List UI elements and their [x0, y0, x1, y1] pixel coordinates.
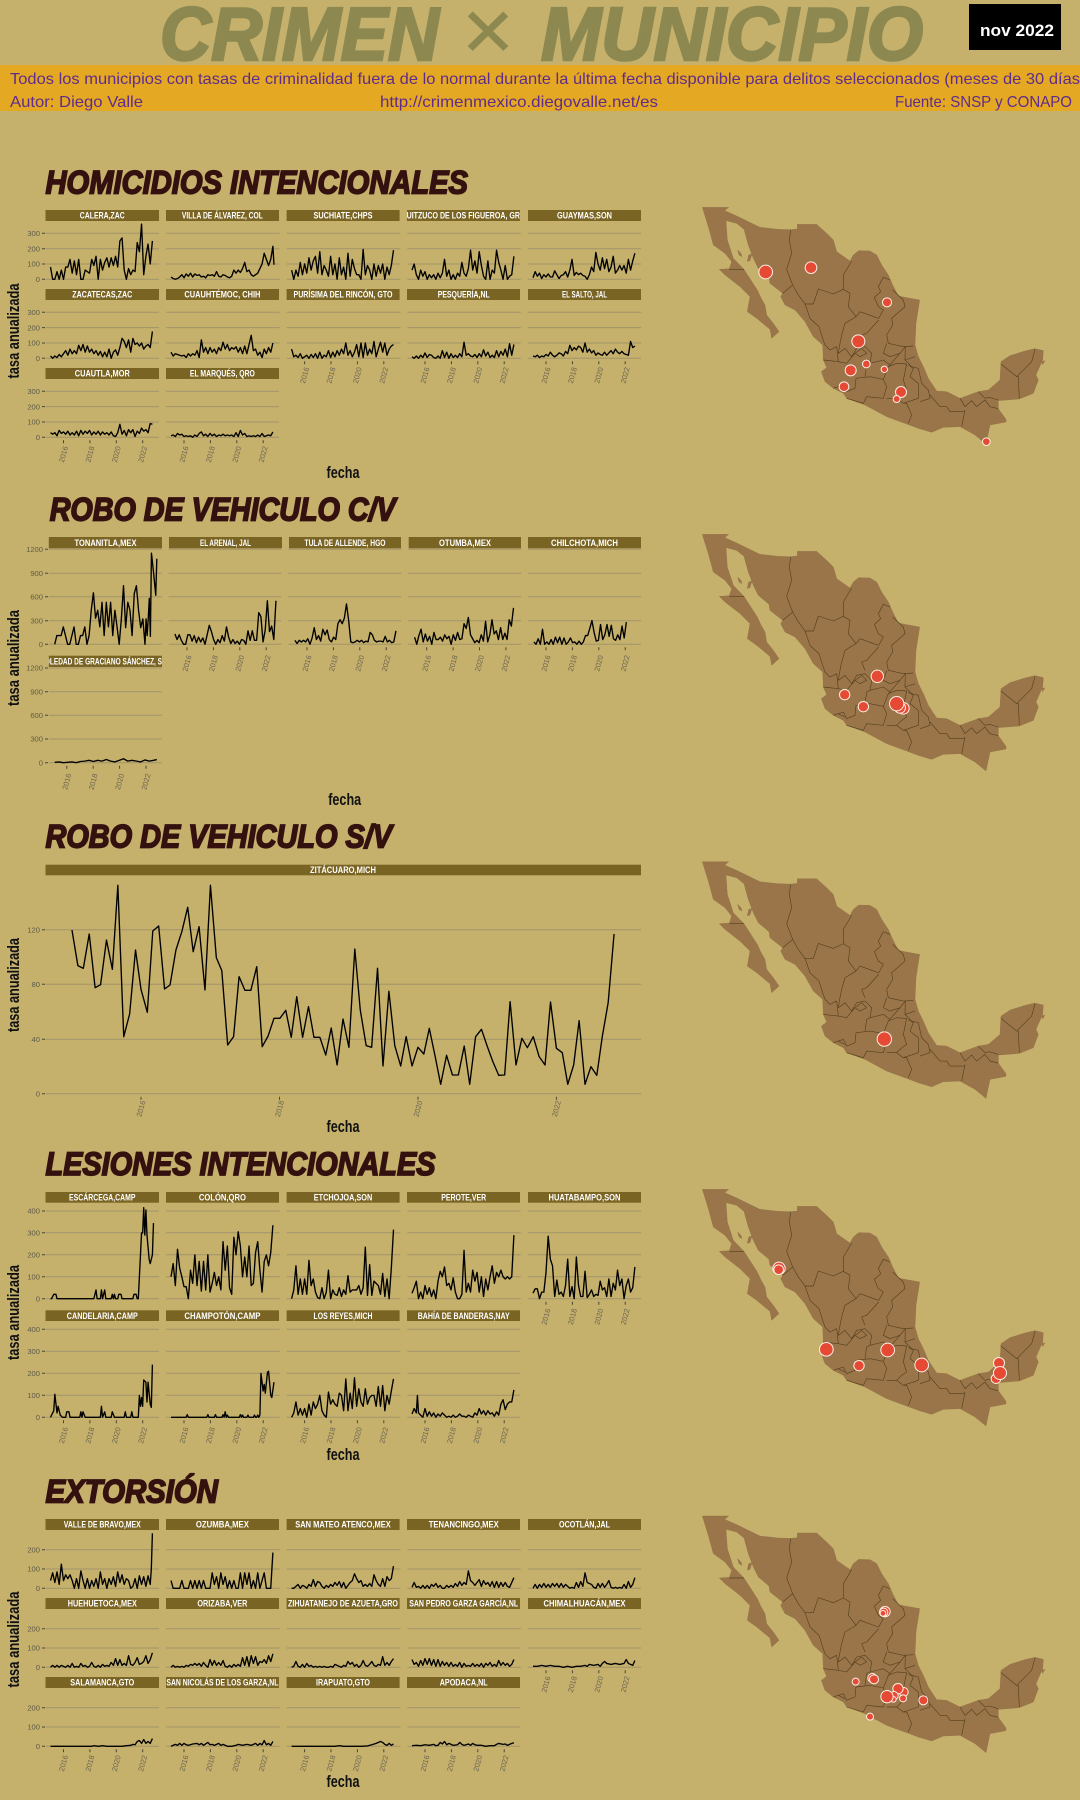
y axis labels: 900 — [30, 569, 43, 578]
panel: CALERA,ZAC — [46, 210, 159, 279]
y axis labels: 900 — [30, 687, 43, 696]
panel: CHIMALHUACAN,MEX: CHIMALHUACÁN,MEX — [544, 1599, 626, 1609]
x axis years: 2018 — [83, 445, 96, 463]
y axis labels: 40 — [32, 1035, 40, 1044]
panel: EL ARENAL,JAL: EL ARENAL, JAL — [200, 538, 251, 548]
x axis years: 2018 — [325, 1754, 337, 1772]
y axis labels: 300 — [27, 1228, 40, 1237]
panel: CANDELARIA,CAMP — [46, 1310, 159, 1417]
x axis years: 2020 — [592, 1308, 605, 1326]
panel: CUAUHTEMOC,CHIH: CUAUHTÉMOC, CHIH — [184, 290, 260, 300]
panel: TULA DE ALLENDE,HGO: TULA DE ALLENDE, HGO — [304, 538, 386, 548]
x axis years: 2022 — [498, 366, 511, 384]
map: extorsion — [702, 1516, 1045, 1753]
panel: HUATABAMPO,SON — [528, 1192, 641, 1299]
panel: EL SALTO,JAL: EL SALTO, JAL — [562, 290, 607, 300]
section: lesiones intencionales — [4, 1146, 1045, 1464]
x axis years: 2016 — [301, 654, 313, 672]
x axis years: 2022 — [257, 1754, 270, 1772]
y axis labels: 0 — [39, 758, 43, 767]
y axis labels: 100 — [27, 260, 40, 269]
y axis labels: 300 — [27, 229, 40, 238]
panel: ETCHOJOA,SON — [287, 1192, 400, 1299]
x axis years: 2022 — [136, 445, 149, 463]
x axis years: 2020 — [110, 1426, 123, 1444]
x axis years: 2016 — [419, 366, 431, 384]
heading: ROBO DE VEHICULO S/V — [46, 818, 394, 854]
x axis years: 2018 — [207, 654, 220, 672]
y axis title: tasa anualizada — [4, 938, 23, 1032]
panel: ORIZABA,VER — [166, 1598, 279, 1667]
y axis labels: 0 — [39, 640, 43, 649]
panel: PEROTE,VER: PEROTE,VER — [441, 1192, 487, 1202]
x axis years: 2018 — [325, 366, 337, 384]
x axis years: 2018 — [204, 1754, 217, 1772]
y axis labels: 200 — [27, 323, 40, 332]
y axis labels: 100 — [27, 1644, 40, 1653]
panel: ZIHUATANEJO DE AZUETA,GRO: ZIHUATANEJO DE AZUETA,GRO — [288, 1599, 398, 1609]
x axis years: 2020 — [110, 445, 123, 463]
x axis years: 2016 — [298, 1426, 311, 1444]
x axis years: 2020 — [351, 366, 364, 384]
subtitle band: http://crimenmexico.diegovalle.net/es — [380, 94, 658, 111]
panel: SUCHIATE,CHPS: SUCHIATE,CHPS — [314, 211, 373, 221]
x axis years: 2018 — [204, 1426, 217, 1444]
x axis years: 2022 — [260, 654, 273, 672]
section: homicidios intencionales — [4, 164, 1045, 482]
panel: EL MARQUES,QRO — [166, 368, 279, 437]
x axis years: 2018 — [445, 1426, 458, 1444]
panel: OCOTLAN,JAL: OCOTLÁN,JAL — [559, 1520, 611, 1530]
panel: CUAUHTEMOC,CHIH — [166, 289, 279, 358]
x axis years: 2016 — [540, 654, 552, 672]
panel: OZUMBA,MEX — [166, 1519, 279, 1588]
x axis years: 2016 — [420, 654, 433, 672]
x axis years: 2016 — [419, 1426, 431, 1444]
y axis labels: 400 — [27, 1325, 40, 1334]
x axis years: 2020 — [230, 1426, 243, 1444]
panel: SAN PEDRO GARZA GARCIA,NL: SAN PEDRO GARZA GARCÍA,NL — [409, 1599, 519, 1609]
heading: ROBO DE VEHICULO C/V — [50, 492, 398, 528]
panel: HUITZUCO DE LOS FIGUEROA,GRO — [402, 210, 526, 279]
panel: HUEHUETOCA,MEX: HUEHUETOCA,MEX — [68, 1599, 137, 1609]
y axis labels: 100 — [27, 418, 40, 427]
x axis years: 2016 — [181, 654, 193, 672]
panel: ZACATECAS,ZAC: ZACATECAS,ZAC — [72, 290, 133, 300]
y axis labels: 600 — [30, 592, 43, 601]
y axis title: tasa anualizada — [4, 1265, 23, 1360]
y axis labels: 80 — [32, 980, 40, 989]
y axis labels: 300 — [30, 616, 43, 625]
x axis years: 2018 — [87, 773, 100, 791]
x axis years: 2018 — [445, 366, 458, 384]
panel: VILLA DE ALVAREZ,COL: VILLA DE ÁLVAREZ, COL — [182, 211, 263, 221]
panel: GUAYMAS,SON — [528, 210, 641, 279]
panel: ESCARCEGA,CAMP — [46, 1192, 159, 1299]
panel: VALLE DE BRAVO,MEX: VALLE DE BRAVO,MEX — [64, 1520, 141, 1530]
section: robo de vehiculo s/v — [4, 818, 1045, 1136]
panel: APODACA,NL — [407, 1677, 520, 1746]
date badge: nov 2022 — [980, 21, 1054, 40]
panel: TENANCINGO,MEX — [407, 1519, 520, 1588]
panel: TONANITLA,MEX — [49, 537, 162, 644]
x axis title: fecha — [326, 1445, 360, 1464]
panel: CANDELARIA,CAMP: CANDELARIA,CAMP — [67, 1311, 138, 1321]
panel: TENANCINGO,MEX: TENANCINGO,MEX — [429, 1520, 499, 1530]
y axis labels: 0 — [36, 433, 40, 442]
map: homicidios — [702, 207, 1045, 445]
x axis years: 2020 — [473, 654, 486, 672]
panel: COLON,QRO — [166, 1192, 279, 1299]
panel: OCOTLAN,JAL — [528, 1519, 641, 1588]
panel: ESCARCEGA,CAMP: ESCÁRCEGA,CAMP — [69, 1192, 136, 1202]
x axis years: 2022 — [619, 1308, 632, 1326]
panel: CHAMPOTON,CAMP: CHAMPOTÓN,CAMP — [184, 1310, 261, 1321]
x axis years: 2016 — [178, 1754, 190, 1772]
y axis labels: 100 — [27, 1272, 40, 1281]
x axis years: 2022 — [377, 1754, 390, 1772]
y axis labels: 0 — [36, 1584, 40, 1593]
y axis labels: 200 — [27, 1624, 40, 1633]
panel: ZITACUARO,MICH: ZITÁCUARO,MICH — [310, 865, 376, 875]
x axis years — [57, 1670, 632, 1772]
x axis years: 2016 — [57, 1754, 70, 1772]
x axis years: 2020 — [592, 654, 605, 672]
x axis years: 2018 — [566, 1308, 579, 1326]
y axis labels — [26, 545, 48, 767]
x axis years: 2022 — [377, 366, 390, 384]
x axis years — [57, 361, 632, 463]
x axis years: 2022 — [140, 773, 152, 791]
x axis years: 2016 — [178, 1426, 190, 1444]
y axis labels — [27, 925, 45, 1098]
x axis years: 2018 — [204, 445, 217, 463]
x axis years: 2022 — [136, 1426, 149, 1444]
panel: BAHIA DE BANDERAS,NAY — [407, 1310, 520, 1417]
x axis title: fecha — [326, 463, 360, 482]
x axis years: 2022 — [619, 1675, 632, 1693]
y axis labels: 300 — [27, 1347, 40, 1356]
panel: OTUMBA,MEX — [409, 537, 521, 644]
y axis labels: 0 — [36, 1089, 40, 1098]
panel: PURISIMA DEL RINCON,GTO: PURÍSIMA DEL RINCÓN, GTO — [294, 289, 393, 300]
x axis years: 2016 — [178, 445, 190, 463]
y axis labels: 100 — [27, 1565, 40, 1574]
map: lesiones intencionales — [702, 1189, 1045, 1426]
y axis labels: 300 — [27, 387, 40, 396]
map: robo de vehiculo con violencia — [702, 534, 1045, 771]
panel: PURISIMA DEL RINCON,GTO — [287, 289, 400, 358]
x axis years: 2018 — [566, 366, 579, 384]
x axis years: 2016 — [298, 366, 311, 384]
panel: SOLEDAD DE GRACIANO SANCHEZ,SLP — [40, 656, 170, 763]
x axis years: 2016 — [57, 445, 70, 463]
x axis years: 2016 — [60, 773, 73, 791]
y axis labels — [27, 1207, 45, 1422]
panel: ZITACUARO,MICH — [46, 865, 641, 1084]
x axis years: 2022 — [619, 366, 632, 384]
x axis years: 2018 — [566, 1675, 579, 1693]
x axis years: 2016 — [540, 1308, 552, 1326]
x axis years: 2020 — [412, 1100, 424, 1118]
x axis years: 2020 — [110, 1754, 123, 1772]
y axis labels: 400 — [27, 1207, 40, 1216]
y axis title: tasa anualizada — [4, 283, 23, 378]
panel: ZACATECAS,ZAC — [46, 289, 159, 358]
y axis labels: 0 — [36, 275, 40, 284]
panel: SAN MATEO ATENCO,MEX — [287, 1519, 400, 1588]
x axis years: 2016 — [540, 366, 552, 384]
y axis labels: 200 — [27, 1250, 40, 1259]
y axis title: tasa anualizada — [4, 610, 23, 706]
x axis title: fecha — [326, 1117, 360, 1136]
panel: HUEHUETOCA,MEX — [46, 1598, 159, 1667]
x axis years: 2016 — [57, 1426, 70, 1444]
x axis years: 2018 — [325, 1426, 337, 1444]
panel: CUAUTLA,MOR: CUAUTLA,MOR — [75, 369, 130, 379]
x axis years: 2020 — [471, 1754, 484, 1772]
x axis years: 2022 — [377, 1426, 390, 1444]
y axis labels: 200 — [27, 1703, 40, 1712]
x axis years — [60, 647, 632, 791]
panel: EL SALTO,JAL — [528, 289, 641, 358]
x axis years: 2018 — [566, 654, 579, 672]
x axis years: 2020 — [230, 445, 243, 463]
panel: APODACA,NL: APODACA,NL — [440, 1678, 488, 1688]
panel: SALAMANCA,GTO: SALAMANCA,GTO — [70, 1678, 134, 1688]
date badge — [969, 4, 1061, 50]
x axis years: 2020 — [351, 1754, 364, 1772]
panel: VALLE DE BRAVO,MEX — [46, 1519, 159, 1588]
subtitle band — [0, 65, 1080, 111]
x axis years: 2016 — [419, 1754, 431, 1772]
panel: LOS REYES,MICH: LOS REYES,MICH — [314, 1311, 372, 1321]
x axis years: 2018 — [83, 1426, 96, 1444]
panel: OTUMBA,MEX: OTUMBA,MEX — [439, 538, 491, 548]
panel: EL ARENAL,JAL — [169, 537, 282, 644]
subtitle band: Fuente: SNSP y CONAPO — [895, 94, 1072, 111]
x axis years: 2022 — [136, 1754, 149, 1772]
x axis years: 2022 — [498, 1426, 511, 1444]
x axis years: 2022 — [380, 654, 393, 672]
y axis labels — [27, 1545, 45, 1751]
panel: ETCHOJOA,SON: ETCHOJOA,SON — [314, 1192, 372, 1202]
y axis labels: 200 — [27, 1369, 40, 1378]
x axis years: 2022 — [550, 1100, 563, 1118]
panel: CHILCHOTA,MICH: CHILCHOTA,MICH — [551, 538, 618, 548]
panel: ZIHUATANEJO DE AZUETA,GRO — [287, 1598, 400, 1667]
panel: CHILCHOTA,MICH — [528, 537, 641, 644]
panel: PEROTE,VER — [407, 1192, 520, 1299]
x axis years: 2020 — [113, 773, 126, 791]
x axis years: 2016 — [298, 1754, 311, 1772]
y axis labels: 0 — [36, 1294, 40, 1303]
y axis labels — [27, 229, 45, 442]
panel: SAN NICOLAS DE LOS GARZA,NL: SAN NICOLÁS DE LOS GARZA,NL — [166, 1678, 279, 1688]
map: robo de vehiculo sin violencia — [702, 862, 1045, 1098]
panel: PESQUERIA,NL: PESQUERÍA,NL — [438, 290, 490, 300]
panel: SUCHIATE,CHPS — [287, 210, 400, 279]
x axis years: 2022 — [619, 654, 632, 672]
x axis years: 2016 — [135, 1100, 147, 1118]
panel: GUAYMAS,SON: GUAYMAS,SON — [557, 211, 612, 221]
y axis labels: 100 — [27, 1391, 40, 1400]
panel: VILLA DE ALVAREZ,COL — [166, 210, 279, 279]
x axis title: fecha — [326, 1772, 360, 1791]
panel: TONANITLA,MEX: TONANITLA,MEX — [74, 538, 137, 548]
x axis years: 2020 — [233, 654, 246, 672]
y axis labels: 1200 — [26, 545, 43, 554]
panel: IRAPUATO,GTO — [287, 1677, 400, 1746]
y axis labels: 600 — [30, 711, 43, 720]
panel: SAN NICOLAS DE LOS GARZA,NL — [166, 1677, 279, 1746]
panel: CHIMALHUACAN,MEX — [528, 1598, 641, 1667]
x axis years — [57, 1302, 632, 1444]
x axis years: 2020 — [592, 366, 605, 384]
x axis years: 2020 — [471, 1426, 484, 1444]
panel: SAN MATEO ATENCO,MEX: SAN MATEO ATENCO,MEX — [295, 1520, 391, 1530]
panel: BAHIA DE BANDERAS,NAY: BAHÍA DE BANDERAS,NAY — [418, 1311, 510, 1321]
x axis years: 2016 — [540, 1675, 552, 1693]
panel: CALERA,ZAC: CALERA,ZAC — [80, 211, 125, 221]
x axis years: 2018 — [273, 1100, 286, 1118]
x axis years: 2018 — [327, 654, 340, 672]
x axis title: fecha — [328, 790, 362, 809]
panel: COLON,QRO: COLÓN,QRO — [199, 1192, 246, 1202]
x axis years: 2020 — [471, 366, 484, 384]
subtitle band: Todos los municipios con tasas de criminalidad fuera de lo normal durante la última fecha disponible para delitos seleccionados (meses de 30 días — [10, 71, 1080, 88]
panel: EL MARQUES,QRO: EL MARQUÉS, QRO — [190, 369, 255, 379]
panel: IRAPUATO,GTO: IRAPUATO,GTO — [316, 1678, 370, 1688]
y axis labels: 120 — [27, 925, 40, 934]
x axis years: 2022 — [257, 445, 270, 463]
y axis labels: 200 — [27, 402, 40, 411]
x axis years: 2018 — [83, 1754, 96, 1772]
panel: TULA DE ALLENDE,HGO — [289, 537, 401, 644]
x axis years: 2020 — [230, 1754, 243, 1772]
x axis years — [135, 1097, 563, 1118]
y axis labels: 0 — [36, 1663, 40, 1672]
y axis labels: 300 — [27, 308, 40, 317]
panel: PESQUERIA,NL — [407, 289, 520, 358]
title: CRIMEN x MUNICIPIO — [160, 0, 923, 79]
y axis title: tasa anualizada — [4, 1591, 23, 1688]
panel: HUATABAMPO,SON: HUATABAMPO,SON — [548, 1192, 620, 1202]
y axis labels: 0 — [36, 1413, 40, 1422]
section: extorsion — [4, 1472, 1045, 1791]
x axis years: 2020 — [592, 1675, 605, 1693]
heading: EXTORSIÓN — [46, 1472, 219, 1509]
panel: OZUMBA,MEX: OZUMBA,MEX — [196, 1520, 249, 1530]
y axis labels: 0 — [36, 354, 40, 363]
x axis years: 2022 — [257, 1426, 270, 1444]
panel: SALAMANCA,GTO — [46, 1677, 159, 1746]
x axis years: 2022 — [499, 654, 512, 672]
x axis years: 2022 — [498, 1754, 511, 1772]
x axis years: 2018 — [447, 654, 460, 672]
y axis labels: 100 — [27, 1723, 40, 1732]
y axis labels: 0 — [36, 1742, 40, 1751]
y axis labels: 100 — [27, 339, 40, 348]
y axis labels: 200 — [27, 1545, 40, 1554]
heading: HOMICIDIOS INTENCIONALES — [46, 164, 468, 200]
panel: ORIZABA,VER: ORIZABA,VER — [197, 1599, 248, 1609]
x axis years: 2020 — [353, 654, 366, 672]
panel: CHAMPOTON,CAMP — [166, 1310, 279, 1417]
panel: CUAUTLA,MOR — [46, 368, 159, 437]
section: robo de vehiculo c/v — [4, 492, 1045, 809]
x axis years: 2020 — [351, 1426, 364, 1444]
heading: LESIONES INTENCIONALES — [46, 1146, 436, 1182]
subtitle band: Autor: Diego Valle — [10, 94, 143, 111]
y axis labels: 200 — [27, 244, 40, 253]
y axis labels: 300 — [30, 735, 43, 744]
y axis labels: 1200 — [26, 664, 43, 673]
x axis years: 2018 — [445, 1754, 458, 1772]
panel: LOS REYES,MICH — [287, 1310, 400, 1417]
panel: SAN PEDRO GARZA GARCIA,NL — [407, 1598, 520, 1667]
